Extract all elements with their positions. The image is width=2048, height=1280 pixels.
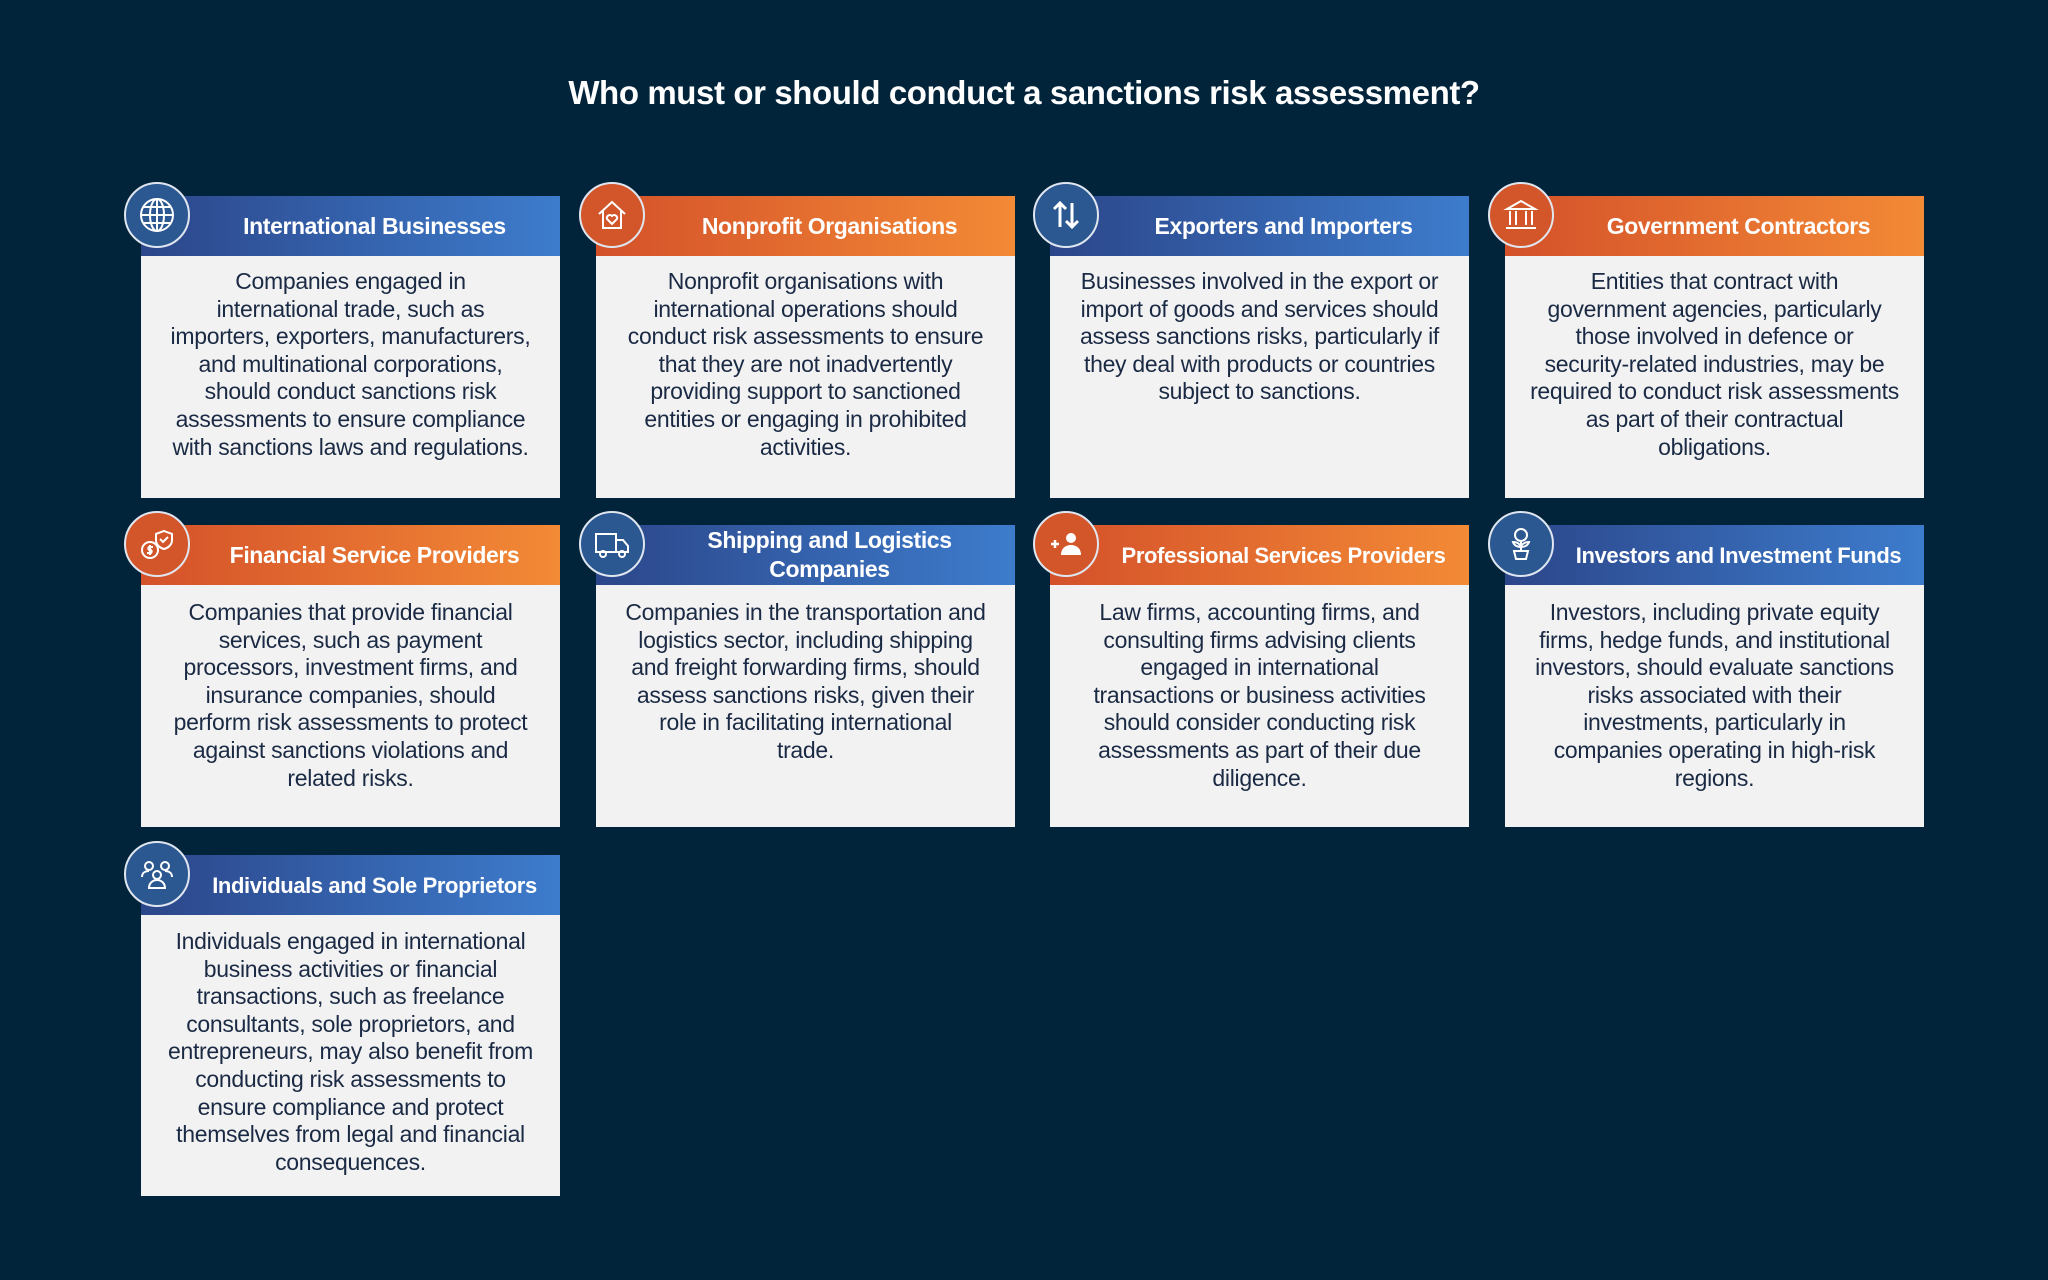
text block: Businesses involved in the export or: [1081, 268, 1438, 294]
text block: subject to sanctions.: [1158, 378, 1361, 404]
text block: should conduct sanctions risk: [205, 378, 496, 404]
icon: money plant: [1488, 511, 1554, 577]
heading: Professional Services Providers: [1122, 542, 1445, 568]
icon: globe: [124, 182, 190, 248]
text block: ensure compliance and protect: [198, 1094, 503, 1120]
text block: transactions or business activities: [1093, 682, 1426, 708]
heading: [141, 525, 560, 585]
heading: Investors and Investment Funds: [1576, 542, 1901, 568]
heading: Government Contractors: [1607, 212, 1870, 238]
text block: [141, 915, 560, 1196]
text block: entrepreneurs, may also benefit from: [168, 1038, 533, 1064]
text block: entities or engaging in prohibited: [644, 406, 967, 432]
heading: [141, 196, 560, 256]
text block: [1505, 585, 1924, 827]
heading: Exporters and Importers: [1155, 212, 1412, 238]
text block: activities.: [760, 434, 851, 460]
text block: and multinational corporations,: [199, 351, 502, 377]
text block: importers, exporters, manufacturers,: [171, 323, 530, 349]
icon: government building: [1488, 182, 1554, 248]
text block: [1505, 256, 1924, 498]
heading: [1050, 196, 1469, 256]
text block: Investors, including private equity: [1550, 599, 1879, 625]
icon: arrows: [1033, 182, 1099, 248]
text block: consequences.: [275, 1149, 426, 1175]
panel: professional services providers: [1033, 511, 1469, 827]
text block: business activities or financial: [204, 956, 497, 982]
panel: exporters and importers: [1033, 182, 1469, 498]
text block: transactions, such as freelance: [197, 983, 504, 1009]
text block: government agencies, particularly: [1548, 296, 1882, 322]
text block: [596, 256, 1015, 498]
text block: trade.: [777, 737, 834, 763]
text block: assess sanctions risks, given their: [637, 682, 974, 708]
heading: [596, 196, 1015, 256]
text block: [1050, 585, 1469, 827]
heading: [1505, 196, 1924, 256]
heading: [1050, 525, 1469, 585]
text block: required to conduct risk assessments: [1530, 378, 1899, 404]
heading: [141, 855, 560, 915]
icon: truck: [579, 511, 645, 577]
panel: nonprofit organisations: [579, 182, 1015, 498]
heading: Individuals and Sole Proprietors: [212, 872, 537, 898]
text block: engaged in international: [1140, 654, 1379, 680]
heading: Companies: [769, 556, 890, 582]
text block: Companies engaged in: [235, 268, 466, 294]
text block: [141, 585, 560, 827]
text block: services, such as payment: [219, 627, 482, 653]
heading: International Businesses: [243, 212, 506, 238]
text block: role in facilitating international: [659, 709, 952, 735]
text block: conduct risk assessments to ensure: [628, 323, 983, 349]
text block: consulting firms advising clients: [1103, 627, 1416, 653]
text block: Individuals engaged in international: [176, 928, 525, 954]
text block: those involved in defence or: [1575, 323, 1854, 349]
heading: Financial Service Providers: [230, 542, 519, 568]
text block: Law firms, accounting firms, and: [1099, 599, 1420, 625]
text block: perform risk assessments to protect: [174, 709, 527, 735]
icon: house heart: [579, 182, 645, 248]
text block: insurance companies, should: [206, 682, 495, 708]
heading: [1505, 525, 1924, 585]
panel: individuals: [124, 841, 560, 1196]
text block: international trade, such as: [217, 296, 484, 322]
text block: processors, investment firms, and: [184, 654, 517, 680]
text block: against sanctions violations and: [193, 737, 508, 763]
text block: firms, hedge funds, and institutional: [1539, 627, 1890, 653]
text block: [596, 585, 1015, 827]
text block: with sanctions laws and regulations.: [172, 434, 529, 460]
text block: themselves from legal and financial: [176, 1121, 525, 1147]
panel: international businesses: [124, 182, 560, 498]
text block: investments, particularly in: [1583, 709, 1846, 735]
text block: Nonprofit organisations with: [668, 268, 943, 294]
text block: should consider conducting risk: [1104, 709, 1415, 735]
text block: related risks.: [287, 765, 414, 791]
heading: Nonprofit Organisations: [702, 212, 957, 238]
text block: as part of their contractual: [1586, 406, 1843, 432]
text block: consultants, sole proprietors, and: [186, 1011, 515, 1037]
icon: people: [124, 841, 190, 907]
text block: providing support to sanctioned: [650, 378, 961, 404]
panel: shipping and logistics: [579, 511, 1015, 827]
text block: investors, should evaluate sanctions: [1535, 654, 1894, 680]
panel: financial service providers: [124, 511, 560, 827]
text block: that they are not inadvertently: [659, 351, 952, 377]
text block: [141, 256, 560, 498]
text block: international operations should: [654, 296, 957, 322]
text block: diligence.: [1212, 765, 1307, 791]
text block: and freight forwarding firms, should: [631, 654, 980, 680]
title: Who must or should conduct a sanctions risk assessment?: [568, 74, 1480, 111]
text block: companies operating in high-risk: [1554, 737, 1875, 763]
text block: assessments to ensure compliance: [176, 406, 525, 432]
text block: [1050, 256, 1469, 498]
text block: security-related industries, may be: [1545, 351, 1884, 377]
panel: government contractors: [1488, 182, 1924, 498]
text block: conducting risk assessments to: [195, 1066, 506, 1092]
text block: logistics sector, including shipping: [638, 627, 973, 653]
text block: obligations.: [1658, 434, 1771, 460]
icon: add people: [1033, 511, 1099, 577]
text block: Entities that contract with: [1591, 268, 1838, 294]
panel: investors: [1488, 511, 1924, 827]
text block: assessments as part of their due: [1098, 737, 1421, 763]
text block: import of goods and services should: [1081, 296, 1438, 322]
icon: money shield: [124, 511, 190, 577]
text block: risks associated with their: [1588, 682, 1841, 708]
heading: [596, 525, 1015, 585]
text block: Companies in the transportation and: [625, 599, 986, 625]
text block: regions.: [1675, 765, 1754, 791]
text block: they deal with products or countries: [1084, 351, 1435, 377]
text block: Companies that provide financial: [188, 599, 513, 625]
text block: assess sanctions risks, particularly if: [1080, 323, 1439, 349]
heading: Shipping and Logistics: [707, 527, 952, 553]
